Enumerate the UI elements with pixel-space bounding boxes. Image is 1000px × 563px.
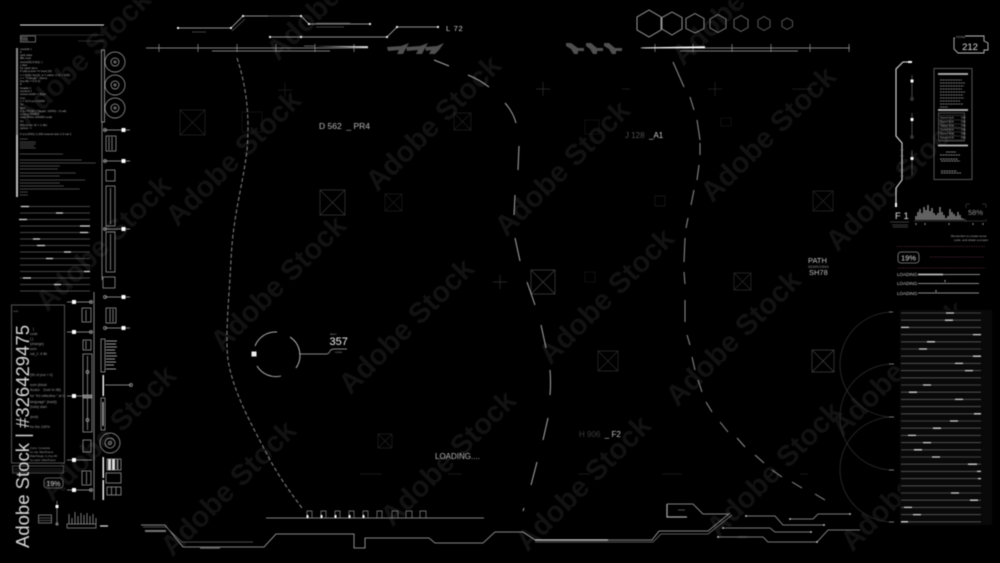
- left code panel: if: [20, 50, 22, 54]
- lower left panel: { }: [30, 337, 34, 341]
- lower left panel: (50 of pos = 0): [30, 373, 53, 377]
- left code panel: $fb.mod: [20, 56, 31, 60]
- bottom left circuit: [141, 513, 732, 548]
- radar ring with value 357: [252, 332, 348, 377]
- readout: J 128 A1: J 128 _A1: [625, 131, 664, 140]
- loading bars: [897, 272, 980, 296]
- watermark pattern: Adobe Stock: [30, 169, 178, 318]
- watermark pattern: Adobe Stock: [835, 409, 983, 558]
- left code panel: vector[0].tf.b[1]. {: [20, 60, 43, 64]
- watermark pattern: Adobe Stock: [820, 109, 968, 258]
- bottom left mini widgets: [38, 501, 108, 528]
- right data panel: Speed limit 120: [940, 120, 966, 124]
- right bar chart: 58%: [968, 208, 983, 217]
- watermark pattern: Adobe Stock: [155, 414, 303, 563]
- bottom slot strip: [266, 511, 484, 518]
- watermark pattern: Adobe Stock: [533, 222, 681, 371]
- left rail: circles and sliders: [102, 50, 130, 288]
- lower left rail: [67, 292, 94, 500]
- bottom right circuit: [667, 504, 860, 543]
- left code panel: cursor.width = 50px: [20, 92, 46, 96]
- dashed curve: right: [673, 62, 825, 500]
- left code panel: (c.key) TIMES: [20, 112, 39, 116]
- lower left panel: for "it's reflective." at 0;: [30, 394, 65, 398]
- left code panel: #: [20, 82, 22, 86]
- readout: PATH SH78: SH78: [809, 268, 828, 277]
- lower left panel: language" (load)): [30, 400, 57, 404]
- badge: 19% right: 19%: [901, 254, 916, 262]
- left code panel: split data: [20, 53, 32, 57]
- left code panel: [16, 25, 104, 197]
- left code panel: v = "Triangle"; (item): [20, 76, 47, 80]
- watermark pattern: Adobe Stock: [375, 384, 523, 533]
- vertical stock id text: Adobe Stock | #326429475: [12, 325, 33, 548]
- left signal rows: [19, 206, 90, 291]
- loading bars: LOADING: [897, 291, 918, 296]
- right bracket path: [895, 61, 914, 207]
- readout: PATH SH78: [808, 256, 829, 277]
- readout: H 906 F2: H 906 _ F2: [579, 430, 621, 439]
- left code panel: if (x.TRUE) { Target: 100%) - (f.val): [20, 109, 66, 113]
- left code panel: $(find.obj: 0) = 1 (fb): [20, 123, 47, 127]
- watermark pattern: Adobe Stock: [825, 294, 973, 443]
- radar ring with value 357: alum: [330, 332, 337, 336]
- lower left panel: sum: [30, 347, 37, 351]
- watermark pattern: Adobe Stock: [489, 94, 637, 243]
- badge: total 212: 212: [962, 42, 978, 53]
- left code panel: if (v.LONG) 1.200 extend size 1.0 val 1: [20, 132, 72, 136]
- right signal rows: [900, 310, 992, 525]
- lower left panel: [12, 305, 65, 473]
- left code panel: item: [20, 106, 26, 110]
- chevrons: left: [387, 43, 444, 54]
- watermark pattern: Adobe Stock: [333, 252, 481, 401]
- right data panel: Speed limit 160: [940, 128, 966, 132]
- badge: 19% left: 19%: [46, 481, 61, 488]
- lower left panel: code: [13, 310, 19, 313]
- label: F 1: [890, 211, 909, 227]
- lower left panel: (change): [30, 342, 44, 346]
- right data panel: Speed limit 100: [940, 116, 966, 120]
- right data panel: Speed limit 140: [940, 124, 966, 128]
- left code panel: } else: [20, 63, 28, 67]
- left code panel: header {: [20, 86, 31, 90]
- watermark pattern: Adobe Stock: [701, 395, 849, 544]
- dashed curve: centre: [434, 60, 550, 511]
- dashed curve: left: [227, 58, 302, 508]
- readout: PATH SH78: PATH: [808, 256, 827, 265]
- watermark pattern: Adobe Stock: [695, 60, 843, 209]
- left code panel: content {: [20, 89, 32, 93]
- chevrons: right: [566, 43, 622, 54]
- lower left panel: #color: Dum fx 0B): [30, 388, 61, 392]
- lower left panel: val_1: # 8b: [30, 352, 47, 356]
- lower left panel: (hold) start: [30, 405, 47, 409]
- watermark pattern: Adobe Stock: [660, 264, 808, 413]
- watermark pattern: Adobe Stock: [510, 409, 658, 558]
- radar ring with value 357: 357: [330, 336, 348, 348]
- readout: PATH SH78: SEARCHING: [808, 265, 829, 269]
- top left circuit lines: [177, 15, 439, 38]
- watermark pattern: Adobe Stock: [205, 209, 353, 358]
- badge: 19% left: [44, 478, 63, 488]
- left code panel: case Point.100000 code: [20, 115, 53, 119]
- lower left panel: code: [30, 332, 38, 336]
- lower left panel: Color: Complete: [30, 446, 51, 450]
- lower left panel: MainTarget: 0_Key #0: [30, 454, 58, 458]
- left code panel: for: [20, 102, 24, 106]
- right bar chart: [914, 204, 986, 225]
- label: F 1: F 1: [895, 211, 909, 222]
- left code panel: module {: [20, 47, 32, 51]
- pink dotted dividers: [897, 246, 985, 268]
- watermark pattern: Adobe Stock: [360, 49, 508, 198]
- top right hexagons: [637, 10, 792, 37]
- watermark pattern: Adobe Stock: [35, 359, 183, 508]
- radar ring with value 357: noise: [335, 350, 343, 354]
- right note text: [951, 234, 988, 242]
- right arcs: [840, 312, 894, 522]
- right note text: Remember to create some: [951, 234, 987, 238]
- left code panel: x = list[i]; key(i); a = value; if (b < 100): [20, 73, 70, 77]
- left code panel: x = 10.0 px 0.0000: [20, 99, 45, 103]
- badge: total 212: [954, 34, 988, 53]
- badge: total 212: TOTAL: [956, 35, 966, 39]
- lower left panel: for the 100%: [30, 425, 50, 429]
- left code panel: for each item: [20, 66, 38, 70]
- faint targeting grid: [180, 82, 834, 474]
- left code panel: (xx): [20, 96, 25, 100]
- left code panel: \\\\\: [21, 37, 29, 43]
- right data panel: Speed limit 180: [940, 132, 966, 136]
- loading bars: LOADING: [897, 281, 918, 286]
- lower left panel: for each: MainFrame: [30, 458, 56, 462]
- top left tick bar: [146, 44, 368, 52]
- lower left panel: sum (block: [30, 383, 47, 387]
- status: LOADING: LOADING....: [435, 452, 480, 461]
- loading bars: LOADING: [897, 272, 918, 277]
- watermark pattern: Adobe Stock: [160, 84, 308, 233]
- left code panel: if (obj.a.size == true) (b): [20, 69, 52, 73]
- lower left panel: {: [30, 327, 35, 331]
- right data panel: Speed limit 200: [940, 136, 966, 140]
- label: L 72: L 72: [446, 24, 464, 33]
- right data panel: [934, 68, 972, 180]
- lower left rail right column: [100, 295, 132, 500]
- left code panel: (c): [20, 119, 24, 123]
- left code panel: option: =: [20, 126, 32, 130]
- lower left panel: for obj: MainFrame: [30, 450, 54, 454]
- lower left panel: (end): [30, 415, 38, 419]
- right note text: code, and obtain a proper: [954, 238, 988, 242]
- top right tick bar: [640, 44, 850, 52]
- readout: D 562 PR4: D 562 _ PR4: [319, 121, 370, 131]
- left code panel: key.flip = 0.5 (t): [20, 79, 40, 83]
- badge: 19% right: [898, 252, 919, 263]
